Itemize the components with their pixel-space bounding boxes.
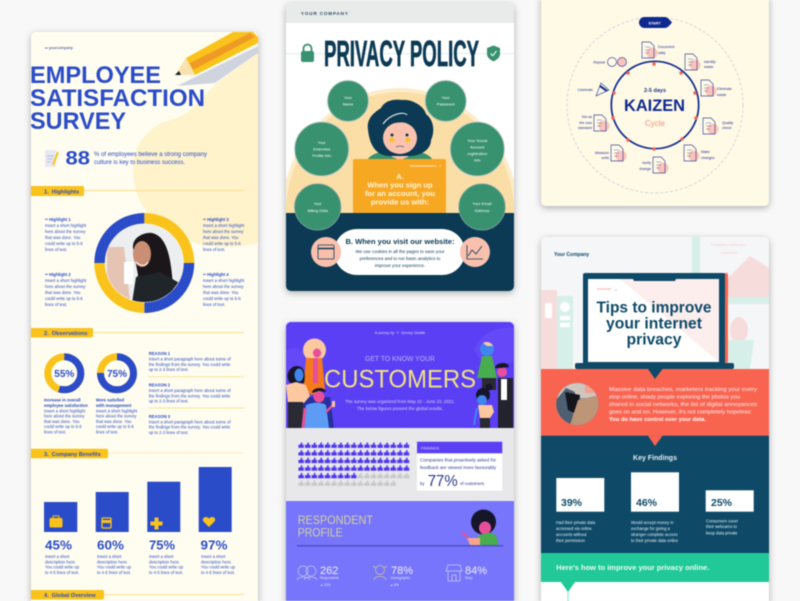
step: set as new standard: the new [579,121,592,125]
round photo [556,383,599,425]
title: SATISFACTION [30,85,205,112]
green bubble: email address [459,184,505,230]
intro paragraph: goes on and on. However, it's not completely hopeless: [609,410,752,416]
panel: internet privacy tips [541,236,769,601]
title: SURVEY [30,108,126,135]
highlight 1: could write up to 5-6 [45,241,83,246]
orange box: A. [396,172,404,181]
stat: 88 percent: % of employees believe a strong company [94,152,207,158]
navy footer [286,213,514,291]
peach blob background [133,53,258,247]
highlight 3: lines of text. [203,247,225,252]
icon: line chart [460,237,490,267]
step: identify waste [685,54,716,70]
orange box: for an account, you [365,189,435,198]
green bubble: your password: Password [437,102,454,106]
survey intro: The survey was organized from May 22 - June 23, 2021. [345,399,455,404]
findings box: Companies that proactively asked for [420,458,497,462]
stat: respondents: 262 [320,565,338,577]
reasons list: Insert a short paragraph here about some of [149,419,231,424]
benefit descriptions: Insert a short [97,554,122,559]
finding 2 text: stranger complete access [631,532,678,537]
green bubble: your name: Name [343,102,354,106]
benefit values: 60% [97,537,124,552]
donut chart: 75 percent: 75% [107,369,127,380]
benefit descriptions: description here. [45,559,76,564]
benefit descriptions: You could write up [45,565,80,570]
step: measure units: units [601,156,609,160]
respondent profile heading: PROFILE [298,528,343,540]
observation text 1: employee satisfaction [44,403,88,408]
survey intro [345,399,455,411]
step: set as new standard [578,115,610,132]
stat: shop [446,565,487,581]
green bubble: extended profile: Your [318,140,326,145]
benefit descriptions: description here. [201,559,232,564]
finding 1 text [556,520,596,543]
bar chart: key findings: 46% [636,497,658,509]
panel: kaizen cycle [541,0,769,206]
panel: employee satisfaction survey [28,32,258,601]
laptop with title [575,273,734,369]
icon: pencil [175,32,258,86]
green bubble: social account: Account [470,144,485,150]
donut chart: 55 percent: 55% [54,369,74,380]
intro paragraph: shared in social networks, the list of digital annoyances [609,402,758,408]
icon: document and pencil [45,150,58,167]
top band with company name [286,3,514,23]
icon: storefront [446,565,462,581]
pink corner text: Company name here [711,243,747,247]
step: document daily [642,42,674,58]
pink corner text: subscribe [721,251,737,255]
step: make changes: Make [701,150,710,154]
top band with company name: YOUR COMPANY [301,11,349,16]
observation text 1: that was done. You [44,419,80,424]
reasons list: Insert a short paragraph here about some of [149,356,231,362]
highlight 2: lines of text. [45,302,67,307]
bar chart: key findings: 39% [561,497,583,509]
navy findings band [541,436,769,553]
green bubble: extended profile: Profile info [312,153,332,158]
benefit values: 45% [45,537,72,552]
icon: padlock [301,44,314,62]
purple header [286,322,514,428]
benefit values [44,540,228,550]
step: celebrate [577,83,609,96]
benefit descriptions: description here. [149,559,180,564]
findings box [417,442,502,491]
finding 2 text: Would accept money in [631,520,674,525]
outer dashed ring [567,17,743,193]
survey by line: A survey by Y Survey Giraffe [375,331,425,335]
title: CUSTOMERS [324,366,476,394]
people illustration right [474,342,513,428]
highlight 2 [45,272,87,307]
respondent profile heading: RESPONDENT [298,515,373,527]
highlight 1: lines of text. [45,247,67,252]
highlight 3: Insert a short highlight [203,223,245,228]
stat: demographic: 78% [391,565,413,577]
icon: shield [487,46,500,62]
step: quality check: Quality [722,121,733,125]
finding 3 text [706,518,739,535]
stat: shop: Shop [465,576,473,580]
title [30,66,204,130]
donut chart: 75 percent [100,357,134,390]
green bubble: extended profile: Extended [313,146,330,152]
highlight 4: that was done. You [203,290,239,295]
reasons list: up to 2-3 lines of text. [149,367,189,372]
coral intro band [541,369,769,436]
donut chart: 55 percent [48,357,81,390]
start pill: START [648,21,661,25]
finding 1 text: Had their private data [556,520,596,525]
benefit descriptions: You could write up [149,565,184,570]
reasons list: the findings from the survey. You could write [149,393,231,398]
highlight 4: lines of text. [203,302,225,307]
reasons list: up to 2-3 lines of text. [149,399,189,404]
stat: 88 percent: culture is key to business success. [94,160,185,166]
stat: demographic [373,565,413,587]
background room shapes [541,236,769,369]
benefit values: 75% [149,537,175,552]
white pill: website text [334,229,465,275]
findings box: of customers. [460,481,485,486]
highlight 1: here about the survey [45,229,86,234]
bar chart: company benefits [44,467,232,532]
white pill: website text: improve your experience. [375,263,425,268]
laptop with title: privacy [626,331,682,348]
inner cycle ring [611,61,699,149]
findings box: FINDINGS [421,446,440,450]
title: PRIVACY POLICY [324,33,479,74]
green bubble: your password [425,80,466,122]
white pill: website text: B. When you visit our website: [346,237,454,246]
observation text 1: Insert a short highlight [44,408,86,413]
stat: demographic: ▲ 8% [390,583,399,587]
heading: GET TO KNOW YOUR [365,356,435,363]
step: measure units: Measure [595,151,609,155]
highlight 3: could write up to 5-6 [203,241,241,246]
highlight 2: that was done. You [45,290,81,295]
step: measure units [595,145,626,162]
finding 3 text: Consumers cover [706,518,739,523]
stat: demographic: Demographic [391,576,410,580]
highlight 2: •• Highlight 2 [45,272,71,277]
highlight 3: •• Highlight 3 [203,217,229,222]
finding 1 text: their permission [556,538,586,543]
step: identify waste: Identify [704,60,716,64]
green bubble: your name: Your [344,95,353,100]
stat: 88 percent [66,150,208,166]
observation text 2 [95,398,138,434]
observation text 2: could write up to 5-6 [96,424,134,429]
observation text 2: More satisfied [96,398,125,402]
findings box: by [420,481,425,486]
orange box: When you sign up [367,180,433,190]
step: eliminate waste [701,80,732,97]
benefit descriptions: description here. [97,559,128,564]
finding 2 text: exchange for giving a [631,526,671,531]
white footer [541,582,769,601]
bar chart: key findings [556,472,754,512]
green bubble: billing data: Your [314,201,322,206]
white pill: website text: We use cookies in all the pages to save your [356,249,445,254]
start pill [639,17,672,28]
company name: Your Company [554,252,589,258]
finding 2 text [631,520,679,543]
section heading: observations [28,328,244,338]
key findings heading: Key Findings [633,455,677,462]
intro paragraph [609,387,758,423]
benefit descriptions: to 4-5 lines of text. [201,570,235,575]
observation text 2: lines of text. [96,430,118,434]
peach arch [286,88,514,214]
title: EMPLOYEE [30,62,161,89]
icon: browser window [311,237,341,267]
panel: privacy policy [282,0,518,298]
company tag: •• yourcompany [45,45,73,50]
step: repeat [593,58,626,66]
benefit descriptions: to 4-5 lines of text. [45,570,79,575]
section heading: company benefits: 3. Company Benefits [44,452,101,458]
centre label: KAIZEN [624,96,685,115]
highlight 2: here about the survey [45,284,86,289]
green bubble: social account: Your Social [467,138,487,143]
observation text 1: here about the survey [44,414,85,419]
step: document daily: daily [658,51,666,55]
observation text 2: with management [95,403,132,408]
icon: plus [150,518,162,530]
highlight 1: Insert a short highlight [45,223,87,228]
highlight 2: could write up to 5-6 [45,296,83,301]
people illustration left [286,338,335,428]
intro paragraph: Massive data breaches, marketers tracking your every [609,387,758,393]
highlight 3: here about the survey [203,229,244,234]
grey thumbs section [286,428,514,501]
laptop with title: Tips to improve [596,299,712,316]
step: quality check: check [722,126,732,130]
respondent profile heading [298,515,373,540]
finding 3 text: keep data private [706,530,738,535]
benefit descriptions: to 4-5 lines of text. [149,570,183,575]
highlight 4: here about the survey [203,284,244,289]
highlight 4 [203,272,245,307]
step: verify change: change [639,167,651,171]
centre label [624,88,685,128]
highlight 4: could write up to 5-6 [203,296,241,301]
pictogram: thumbs up 77 percent [298,442,410,487]
step markers [611,62,698,151]
section heading: highlights [28,186,244,196]
green bubble: social account [450,122,504,176]
reasons list: Insert a short paragraph here about some of [149,388,231,393]
green bubble: social account: registration [467,151,487,156]
icon: people [297,566,317,580]
observation text 2: here about the survey [96,414,137,419]
observation text 1: could write up to 5-6 [44,424,82,429]
step: verify change: Verify [642,161,651,165]
highlight 3: that was done. You [203,235,239,240]
reasons list: the findings from the survey. You could write [149,362,231,367]
findings box: 77% [428,473,458,490]
highlight 4: •• Highlight 4 [203,272,229,277]
step: set as new standard: Set as [582,115,592,119]
step: eliminate waste: Eliminate [717,87,732,91]
donut with photo [94,213,194,313]
intro paragraph: step online, shady people exploring the photos you [609,394,740,400]
green bubble: billing data [295,184,341,230]
section heading: global overview: 4. Global Overview [44,593,96,599]
panel: customers survey [286,322,514,601]
orange box [353,159,446,219]
white pill: website text: preferences and to run basic analytics to [360,256,441,261]
centre label: 2-5 days [644,88,666,94]
stat: respondents: Respondents [320,576,339,580]
icon: group [373,566,387,580]
step: verify change [639,157,668,174]
intro paragraph: You do have control over your data. [609,417,707,423]
green bubble: billing data: Billing Data [308,208,329,213]
icon: briefcase [50,516,62,528]
section heading: highlights: 1. Highlights [44,189,79,195]
finding 3 text: their webcams to [706,524,738,529]
character illustration [368,100,433,160]
step: identify waste: waste [704,65,713,69]
observation text 1: lines of text. [44,430,66,434]
step: make changes: changes [701,156,715,160]
green bubble: extended profile [295,122,349,176]
benefit descriptions: You could write up [201,565,236,570]
benefit descriptions: Insert a short [45,554,70,559]
woman at laptop illustration [462,510,498,545]
icon: calendar [102,518,111,528]
step: celebrate: Celebrate [577,88,593,92]
reasons list: REASON 2 [149,383,171,388]
centre label: Cycle [645,119,666,128]
step: eliminate waste: waste [717,93,726,97]
icon: heart [203,517,215,527]
stat: respondents [297,565,339,587]
finding 2 text: to their private data online [631,538,679,543]
benefit descriptions: to 4-5 lines of text. [97,570,131,575]
reasons list: REASON 1 [149,351,171,356]
finding 1 text: accounts without [556,532,587,537]
benefit descriptions: Insert a short [201,554,226,559]
benefit descriptions: You could write up [97,565,132,570]
observation text 2: that was done. You [96,419,132,424]
survey intro: The below figures present the global results. [357,406,443,411]
step: document daily: Document [658,45,674,49]
bar chart: key findings: 25% [711,497,733,509]
section heading: global overview [28,590,244,600]
section heading: company benefits [28,449,244,458]
stat: 88 percent: 88 [66,148,90,170]
step: repeat: Repeat [593,60,605,64]
observation text 1: Increase in overall [44,398,81,402]
green bubble: your name [328,80,368,122]
green bubble: your password: Your [442,95,450,100]
observation text 1 [44,398,88,434]
benefit descriptions: Insert a short [149,554,174,559]
observation text 2: Insert a short highlight [96,408,138,413]
benefit descriptions [45,554,236,575]
highlight 1: •• Highlight 1 [45,217,71,222]
green call-to-action band: Here's how to improve your privacy online. [556,565,709,572]
highlight 2: Insert a short highlight [45,278,87,283]
highlight 3 [203,217,245,252]
pointer [648,436,662,446]
reasons list [149,351,244,435]
finding 1 text: accessed via online [556,526,592,531]
green bubble: email address: Address [475,208,489,213]
highlight 1: that was done. You [45,235,81,240]
laptop with title: your internet [606,315,702,332]
reasons list: up to 2-3 lines of text. [149,430,189,435]
section heading: observations: 2. Observations [44,331,88,337]
orange box: provide us with: [371,198,429,206]
step: quality check [703,118,733,134]
pointer [648,369,662,379]
reasons list: REASON 3 [149,414,171,419]
pink corner text [711,243,747,255]
step: make changes [684,145,715,162]
highlight 1 [45,217,87,252]
stat: respondents: ▲ 20% [320,583,331,587]
stat: shop: 84% [465,565,487,577]
findings box: feedback are viewed more favourably [420,465,497,470]
step: set as new standard: standard [578,126,592,130]
green call-to-action band [541,553,769,582]
green bubble: email address: Your Email [472,201,492,206]
green bubble: social account: info [474,158,481,162]
benefit values: 97% [200,537,228,552]
pointer [561,582,575,601]
highlight 4: Insert a short highlight [203,278,245,283]
reasons list: the findings from the survey. You could write [149,425,231,430]
